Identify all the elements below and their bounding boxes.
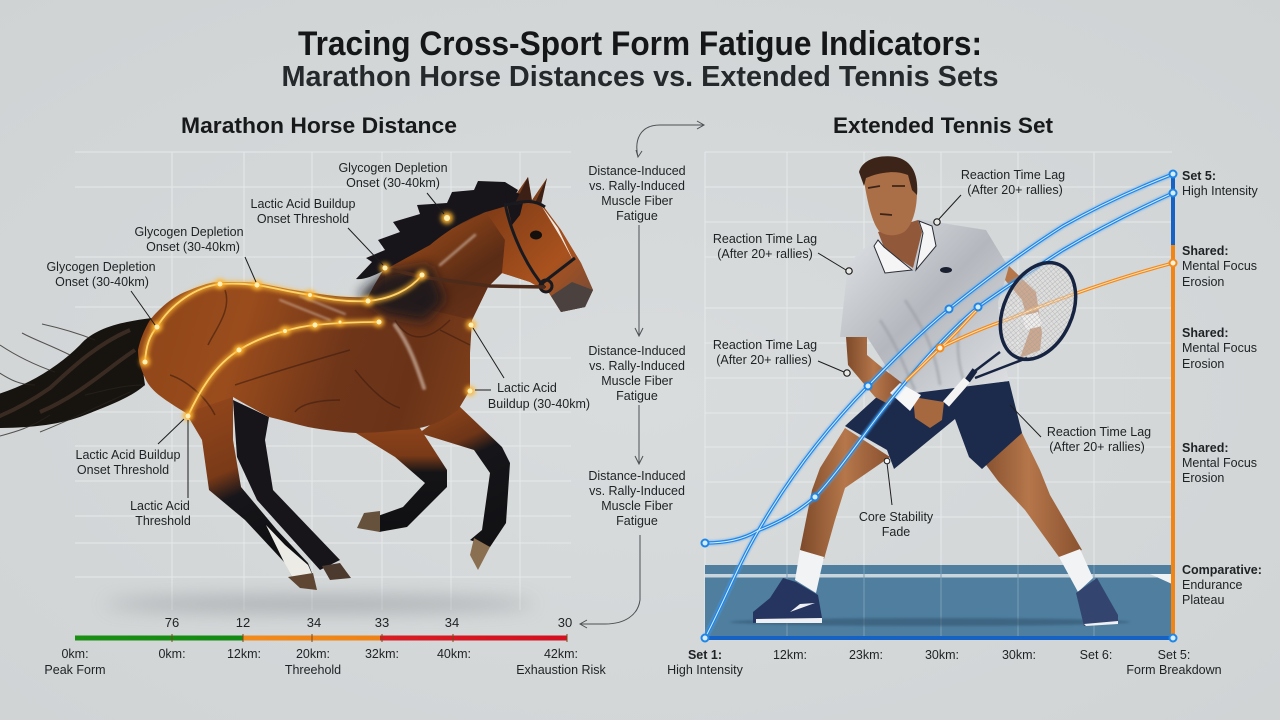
timeline bar — [75, 636, 567, 640]
callout: glycogen depletion top: Onset (30-40km) — [346, 176, 440, 190]
horse head shading — [486, 203, 593, 312]
title — [282, 25, 998, 93]
arrow: to extended tennis set — [636, 121, 704, 157]
callout: core stability fade: Core Stability — [859, 510, 934, 524]
player hair — [859, 156, 917, 195]
label: shared focus 1: Mental Focus — [1182, 259, 1257, 273]
illustration: tennis racket — [946, 250, 1090, 404]
bottom axis labels — [667, 648, 1222, 677]
horse chart grid — [75, 152, 571, 610]
horse eye — [530, 230, 542, 240]
label: comparative plateau: Endurance — [1182, 578, 1243, 592]
callout: lactic acid threshold: Lactic Acid — [130, 499, 190, 513]
distance timeline — [44, 615, 607, 677]
connector text 2 — [588, 344, 686, 403]
timeline top values: 33 — [375, 615, 389, 630]
horse body and neck — [138, 177, 593, 433]
callout: reaction time right: Reaction Time Lag — [1047, 425, 1151, 439]
callout: reaction time top: (After 20+ rallies) — [967, 183, 1063, 197]
connector text 3: Muscle Fiber — [601, 499, 673, 513]
callout: core stability fade — [859, 458, 934, 539]
connector text 2: vs. Rally-Induced — [589, 359, 685, 373]
player head — [864, 165, 917, 235]
player collar right — [916, 221, 936, 270]
horse muzzle — [551, 282, 593, 312]
label: shared focus 2: Erosion — [1182, 357, 1224, 371]
callout: glycogen depletion left — [46, 260, 156, 325]
bottom axis labels: Set 1: — [688, 648, 722, 662]
timeline bottom labels: 40km: — [437, 647, 471, 661]
ground shadow — [105, 596, 535, 612]
shoe details — [756, 603, 1118, 626]
connector text 2: Muscle Fiber — [601, 374, 673, 388]
timeline top values: 34 — [307, 615, 321, 630]
timeline bottom labels — [44, 647, 607, 677]
callout: glycogen depletion left: Glycogen Depletion — [46, 260, 156, 274]
bottom axis labels: Set 6: — [1080, 648, 1112, 662]
timeline top values: 76 — [165, 615, 179, 630]
right side labels — [1182, 169, 1262, 607]
callout: lactic acid buildup onset upper: Lactic Acid Buildup — [251, 197, 356, 211]
player shoe left — [753, 578, 822, 623]
connector text 1: Muscle Fiber — [601, 194, 673, 208]
player socks — [795, 549, 1093, 593]
horse far hooves — [322, 563, 351, 580]
label: shared focus 3: Shared: — [1182, 441, 1229, 455]
callout: lactic acid buildup onset lower — [76, 419, 184, 477]
player right arm — [1005, 266, 1042, 358]
callout: reaction time left lower — [713, 338, 850, 376]
axes — [705, 175, 1175, 640]
callout: reaction time right: (After 20+ rallies) — [1049, 440, 1145, 454]
label: set 5 — [1182, 169, 1258, 198]
horse far foreleg — [419, 405, 510, 547]
connector text 3: vs. Rally-Induced — [589, 484, 685, 498]
bottom axis labels: 23km: — [849, 648, 883, 662]
horse shine — [280, 235, 475, 388]
label: shared focus 1: Shared: — [1182, 244, 1229, 258]
player wristband — [890, 383, 921, 411]
horse reins — [385, 268, 545, 287]
callout: glycogen depletion middle: Onset (30-40km) — [146, 240, 240, 254]
horse withers shadow — [358, 265, 445, 322]
label: comparative plateau: Plateau — [1182, 593, 1224, 607]
callout: lactic acid buildup right: Buildup (30-40km) — [488, 397, 590, 411]
label: shared focus 3 — [1182, 441, 1257, 485]
horse neck shading — [385, 203, 510, 320]
callout: lactic acid buildup right — [473, 328, 590, 411]
label: comparative plateau — [1182, 563, 1262, 607]
callout: reaction time left upper — [713, 232, 852, 274]
bottom axis labels: Form Breakdown — [1126, 663, 1222, 677]
label: shared focus 2: Mental Focus — [1182, 341, 1257, 355]
connector text 3: Distance-Induced — [588, 469, 686, 483]
arrow: down 2 — [635, 405, 643, 464]
horse bridle — [505, 201, 575, 292]
timeline top values: 30 — [558, 615, 572, 630]
horse white blaze — [541, 205, 574, 262]
callout: lactic acid buildup onset upper — [251, 197, 383, 265]
player shirt — [840, 219, 1009, 395]
player right wristband — [1022, 312, 1042, 330]
timeline bottom labels: Peak Form — [44, 663, 106, 677]
timeline top values: 12 — [236, 615, 250, 630]
panel: shared fatigue connector column — [580, 121, 704, 628]
heading: Extended Tennis Set: Extended Tennis Set — [833, 113, 1054, 138]
player collar left — [874, 240, 912, 273]
label: shared focus 2: Shared: — [1182, 326, 1229, 340]
panel: marathon horse chart — [0, 152, 607, 677]
player shoe right — [1076, 578, 1118, 626]
callout: lactic acid buildup onset lower: Lactic Acid Buildup — [76, 448, 181, 462]
horse white sock — [266, 525, 312, 577]
callout: glycogen depletion middle: Glycogen Depletion — [134, 225, 244, 239]
fatigue curves — [705, 174, 1173, 638]
illustration: galloping horse — [0, 177, 593, 590]
player left arm — [846, 337, 902, 405]
bottom axis labels: High Intensity — [667, 663, 744, 677]
fatigue trace lines — [140, 212, 476, 421]
arrow: to timeline — [580, 535, 640, 628]
player hand and wrist — [913, 397, 944, 428]
horse ears — [514, 177, 547, 205]
timeline top values: 34 — [445, 615, 459, 630]
callout: reaction time left lower: (After 20+ rallies) — [716, 353, 812, 367]
connector text 1 — [588, 164, 686, 223]
horse near hind leg — [186, 380, 312, 577]
arrow: down 1 — [635, 225, 643, 336]
connector text 1: Distance-Induced — [588, 164, 686, 178]
illustration: tennis player — [753, 156, 1118, 626]
horse muscle lines — [170, 290, 470, 415]
callout: lactic acid buildup onset upper: Onset Threshold — [257, 212, 349, 226]
panel: extended tennis chart — [667, 152, 1262, 677]
timeline bottom labels: 0km: — [158, 647, 186, 661]
horse near hoof — [288, 573, 317, 590]
player left leg — [800, 428, 890, 559]
label: comparative plateau: Comparative: — [1182, 563, 1262, 577]
callout: glycogen depletion left: Onset (30-40km) — [55, 275, 149, 289]
label: shared focus 1: Erosion — [1182, 275, 1224, 289]
callout: reaction time right — [1010, 405, 1151, 454]
callout: glycogen depletion top — [338, 161, 448, 214]
connector text 2: Fatigue — [616, 389, 658, 403]
player right leg — [975, 433, 1082, 557]
callout: reaction time top: Reaction Time Lag — [961, 168, 1065, 182]
bottom axis labels: 30km: — [925, 648, 959, 662]
bottom axis labels: 30km: — [1002, 648, 1036, 662]
horse front hoof — [357, 511, 380, 532]
bottom axis labels: 12km: — [773, 648, 807, 662]
callout: reaction time left upper: (After 20+ rallies) — [717, 247, 813, 261]
connector text 1: Fatigue — [616, 209, 658, 223]
horse near foreleg — [356, 408, 447, 532]
timeline bottom labels: 0km: — [61, 647, 89, 661]
connector text 1: vs. Rally-Induced — [589, 179, 685, 193]
player logo — [940, 267, 952, 273]
title: Tracing Cross-Sport Form Fatigue Indicators: — [298, 25, 982, 63]
timeline bottom labels: Threehold — [285, 663, 341, 677]
player face features — [868, 186, 905, 215]
timeline bottom labels: 12km: — [227, 647, 261, 661]
label: set 5: High Intensity — [1182, 184, 1258, 198]
player neck — [878, 220, 922, 268]
horse tail — [0, 318, 152, 436]
timeline bottom labels: 42km: — [544, 647, 578, 661]
label: shared focus 2 — [1182, 326, 1257, 371]
timeline bottom labels: Exhaustion Risk — [516, 663, 607, 677]
callout: core stability fade: Fade — [882, 525, 910, 539]
connector text 3: Fatigue — [616, 514, 658, 528]
callout: lactic acid buildup right: Lactic Acid — [497, 381, 557, 395]
title: Marathon Horse Distances vs. Extended Tennis Sets — [282, 61, 998, 93]
timeline bottom labels: 20km: — [296, 647, 330, 661]
tennis chart grid — [705, 152, 1172, 638]
player shirt folds — [880, 300, 965, 390]
callout: reaction time left lower: Reaction Time Lag — [713, 338, 817, 352]
bottom axis labels: Set 5: — [1158, 648, 1190, 662]
callout: glycogen depletion top: Glycogen Depletion — [338, 161, 448, 175]
connector text 2: Distance-Induced — [588, 344, 686, 358]
timeline bottom labels: 32km: — [365, 647, 399, 661]
connector text 3 — [588, 469, 686, 528]
horse far hind leg — [233, 400, 340, 570]
callout: lactic acid buildup onset lower: Onset Threshold — [77, 463, 169, 477]
horse mane — [356, 181, 518, 279]
timeline top values — [165, 615, 572, 630]
horse forelock — [505, 190, 525, 225]
callout: lactic acid threshold — [130, 420, 191, 528]
label: set 5: Set 5: — [1182, 169, 1216, 183]
curve markers — [702, 170, 1176, 642]
callout: reaction time top — [934, 168, 1065, 225]
label: shared focus 3: Erosion — [1182, 471, 1224, 485]
callout: glycogen depletion middle — [134, 225, 256, 282]
callout: lactic acid threshold: Threshold — [135, 514, 191, 528]
heading: Marathon Horse Distance: Marathon Horse Distance — [181, 113, 457, 138]
player shorts — [845, 381, 1022, 469]
callout: reaction time left upper: Reaction Time Lag — [713, 232, 817, 246]
tennis court — [705, 565, 1172, 638]
label: shared focus 3: Mental Focus — [1182, 456, 1257, 470]
label: shared focus 1 — [1182, 244, 1257, 289]
